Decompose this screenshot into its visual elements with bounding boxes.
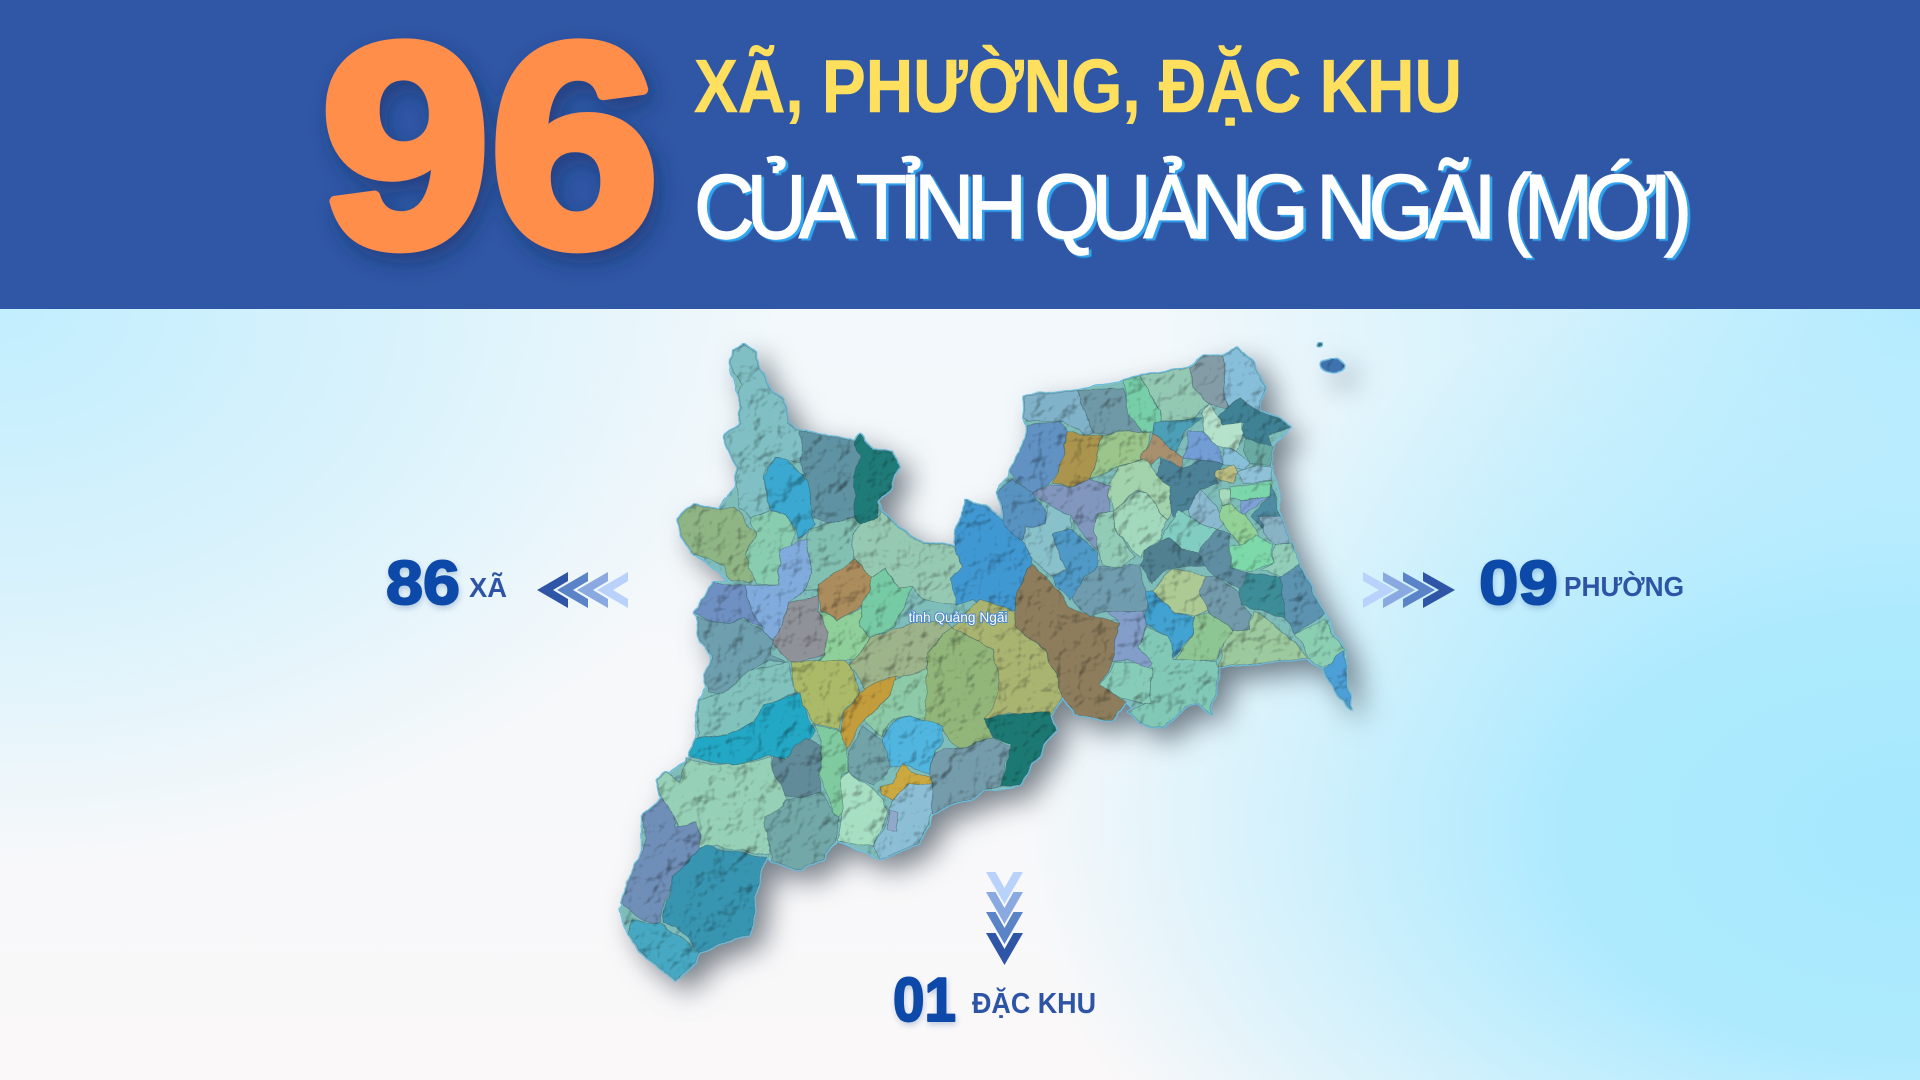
- heading line 2: CỦA TỈNH QUẢNG NGÃI (MỚI): [694, 156, 1692, 258]
- offshore island: [1317, 344, 1346, 371]
- communes: upper map: [620, 344, 1351, 980]
- stat: 01 đặc khu: ĐẶC KHU: [972, 987, 1096, 1020]
- map outline base: [620, 344, 1351, 980]
- stat: 01 đặc khu: 01: [893, 966, 956, 1035]
- header band: [0, 0, 1920, 309]
- stat: 01 đặc khu: [893, 966, 1096, 1035]
- stat: 09 phường: 09: [1479, 549, 1558, 618]
- background gradient: [0, 309, 1920, 1080]
- heading line 1: XÃ, PHƯỜNG, ĐẶC KHU: [694, 44, 1462, 128]
- map label: tỉnh Quảng Ngãi: [908, 609, 1008, 625]
- communes: lower map: [620, 660, 1058, 980]
- stat: 86 xã: 86: [386, 549, 460, 618]
- map of Quảng Ngãi province: [620, 344, 1351, 980]
- stat: 86 xã: XÃ: [469, 572, 507, 603]
- arrow: down chevrons: [986, 872, 1023, 965]
- stat: 09 phường: PHƯỜNG: [1564, 571, 1684, 602]
- arrow: right chevrons: [1363, 572, 1455, 608]
- stat: 09 phường: [1479, 549, 1684, 618]
- arrow: left chevrons: [537, 572, 628, 608]
- stat: 86 xã: [386, 549, 507, 618]
